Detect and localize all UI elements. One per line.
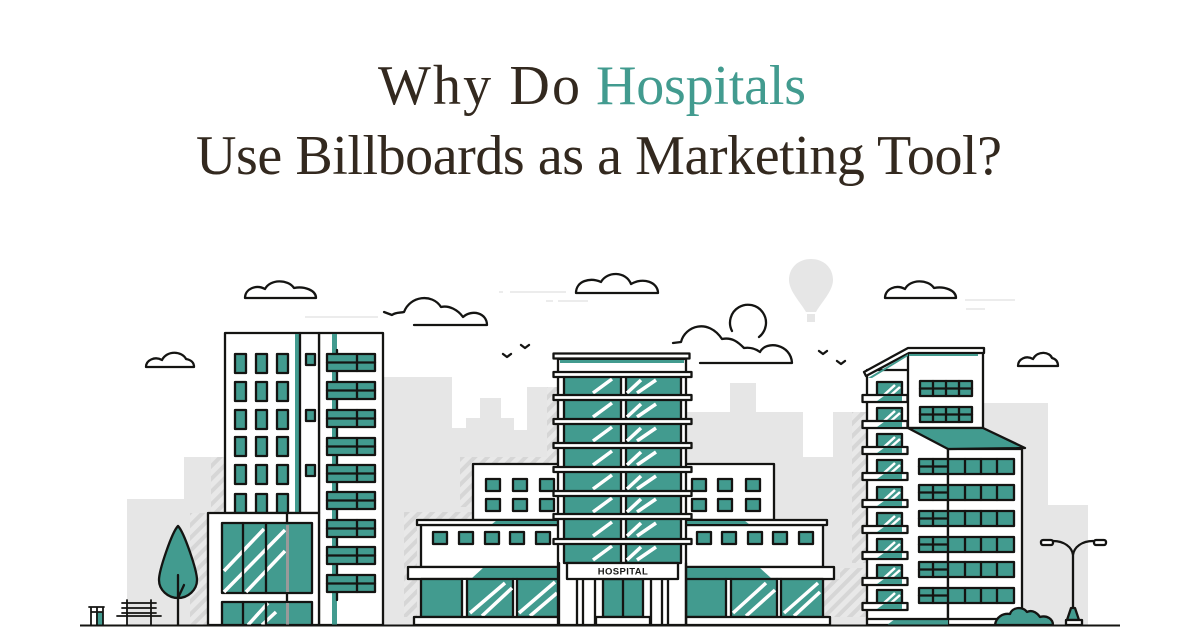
title: Use Billboards as a Marketing Tool? <box>196 125 1002 187</box>
storefront glass <box>421 579 823 617</box>
lower block <box>948 449 1022 625</box>
cloud: top right <box>885 281 956 298</box>
icon: sun <box>730 305 766 337</box>
entrance <box>559 563 686 625</box>
icon: hot air balloon <box>789 259 833 322</box>
title: Why Do <box>378 55 580 117</box>
lower wings <box>417 520 827 567</box>
cloud: small right <box>1018 353 1058 366</box>
title: Hospitals <box>596 55 806 117</box>
upper wings <box>473 464 774 520</box>
cloud: centre right <box>673 326 792 363</box>
hospital sign: HOSPITAL <box>598 566 648 578</box>
icon: birds <box>503 345 845 364</box>
teal roof <box>908 428 1025 449</box>
upper windows <box>920 381 972 422</box>
cloud: top left <box>245 281 316 298</box>
building: hospital <box>408 354 834 625</box>
base steps <box>414 617 830 625</box>
icon: bush <box>995 608 1053 625</box>
icon: tree <box>159 526 197 625</box>
ground floor <box>867 619 1000 625</box>
side balconies <box>862 382 908 610</box>
building: left tower <box>208 333 383 625</box>
tower windows <box>235 354 315 513</box>
roof and floor bands <box>554 354 692 544</box>
podium <box>208 513 319 625</box>
glass reflections <box>593 379 656 560</box>
title <box>196 55 1002 187</box>
icon: street lamp <box>1041 540 1106 625</box>
icon: trash bin <box>89 607 104 625</box>
balcony windows <box>327 354 375 592</box>
slanted roof <box>864 348 984 376</box>
central tower <box>554 354 692 625</box>
decorative sky dashes <box>305 292 1015 317</box>
icon: bench <box>117 600 161 625</box>
cloud: top centre <box>576 274 658 293</box>
window rows <box>919 459 1014 603</box>
hospital sign <box>567 563 678 579</box>
grey city skyline <box>127 377 1088 625</box>
cloud: centre left <box>384 298 487 325</box>
canopies <box>408 567 834 579</box>
building: right apartment block <box>862 348 1025 625</box>
ground line <box>80 624 1120 626</box>
cloud: small left <box>146 353 194 367</box>
